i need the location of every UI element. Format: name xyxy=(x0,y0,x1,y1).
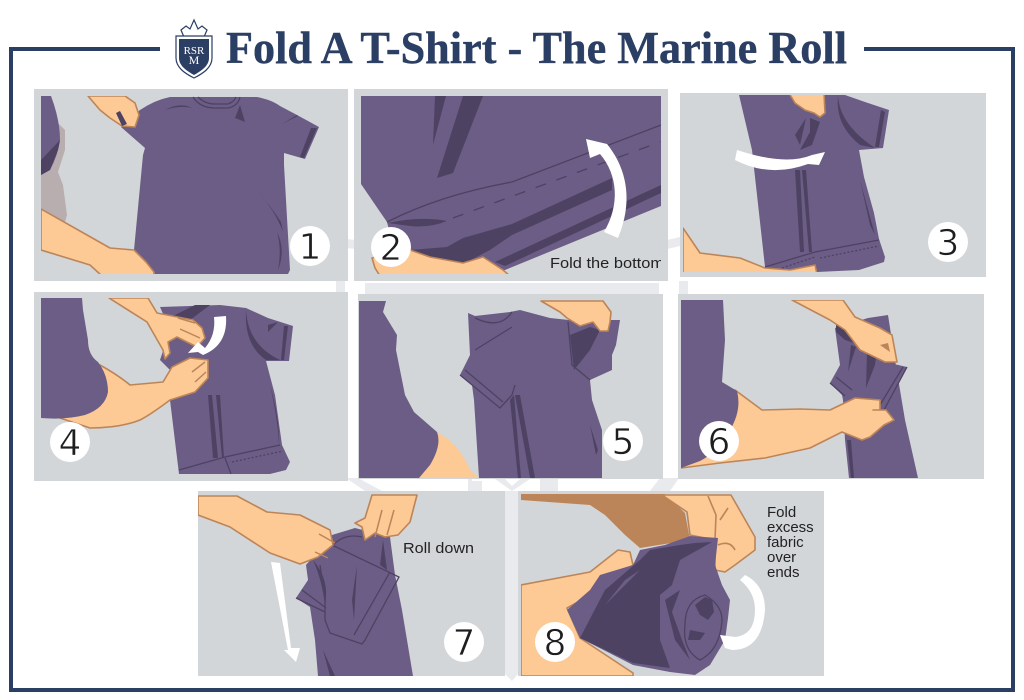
top hand xyxy=(662,495,755,572)
hand xyxy=(541,301,611,331)
arm xyxy=(681,390,894,468)
number 6 xyxy=(699,421,739,463)
person torso xyxy=(359,301,438,478)
t-shirt hem xyxy=(361,96,661,274)
caption: Roll down xyxy=(403,540,474,557)
caption: fabric xyxy=(767,534,804,551)
shade behind person xyxy=(41,123,67,222)
fabric roll swirl xyxy=(665,590,714,660)
monogram: RSR xyxy=(184,45,205,57)
creases xyxy=(388,96,483,226)
number 7 xyxy=(444,622,484,664)
number 2 xyxy=(371,227,411,269)
number 5: 5 xyxy=(612,422,634,463)
panel 8 xyxy=(518,491,824,676)
t-shirt xyxy=(160,305,293,474)
t-shirt xyxy=(739,95,889,272)
arrow across xyxy=(735,150,825,170)
panel 6 xyxy=(678,294,984,479)
panel 1 xyxy=(34,89,348,281)
caption: Fold the bottom xyxy=(550,255,664,272)
number 3: 3 xyxy=(937,223,959,264)
panel 3 xyxy=(680,93,986,277)
arrow down xyxy=(271,562,300,662)
t-shirt xyxy=(460,310,620,478)
number 5 xyxy=(603,421,643,463)
panel 4 xyxy=(34,292,348,481)
number 3 xyxy=(928,222,968,264)
person torso xyxy=(41,96,60,175)
person torso xyxy=(41,298,108,419)
number 2: 2 xyxy=(380,228,402,269)
t-shirt xyxy=(296,528,413,676)
number 6: 6 xyxy=(708,422,730,463)
number 1 xyxy=(290,226,330,268)
hand top xyxy=(789,93,825,117)
watermark crest xyxy=(336,237,688,681)
hand right xyxy=(355,495,417,540)
caption: over xyxy=(767,549,796,566)
person torso xyxy=(681,300,738,468)
arm xyxy=(683,228,817,274)
number 7: 7 xyxy=(453,623,475,664)
arm left xyxy=(198,496,333,564)
crown xyxy=(181,20,207,37)
number 1: 1 xyxy=(299,227,321,268)
shaded forearm xyxy=(521,494,690,548)
panel 7 xyxy=(198,491,505,676)
arrow curl xyxy=(720,575,765,650)
arrow up xyxy=(586,139,627,238)
t-shirt xyxy=(121,97,319,274)
shield xyxy=(176,36,212,78)
caption: ends xyxy=(767,564,800,581)
hand left xyxy=(88,96,139,127)
t-shirt xyxy=(830,315,918,478)
number 8: 8 xyxy=(544,623,566,664)
lower arm xyxy=(60,358,208,428)
skin xyxy=(419,432,479,478)
lower hand xyxy=(521,550,633,676)
arm xyxy=(41,209,154,276)
upper hand xyxy=(109,298,205,359)
panel 2 xyxy=(354,89,668,281)
number 4: 4 xyxy=(59,423,81,464)
t-shirt bundle xyxy=(567,536,730,675)
hand xyxy=(372,250,510,276)
caption: Fold xyxy=(767,504,796,521)
logo crest xyxy=(176,20,212,78)
caption: excess xyxy=(767,519,814,536)
upper hand xyxy=(792,300,897,362)
logo crest: M xyxy=(189,53,200,67)
panel 5 xyxy=(358,294,663,479)
number 4 xyxy=(50,422,90,464)
title: Fold A T-Shirt - The Marine Roll xyxy=(226,22,847,73)
arrow turn xyxy=(188,316,226,355)
number 8 xyxy=(535,622,575,664)
